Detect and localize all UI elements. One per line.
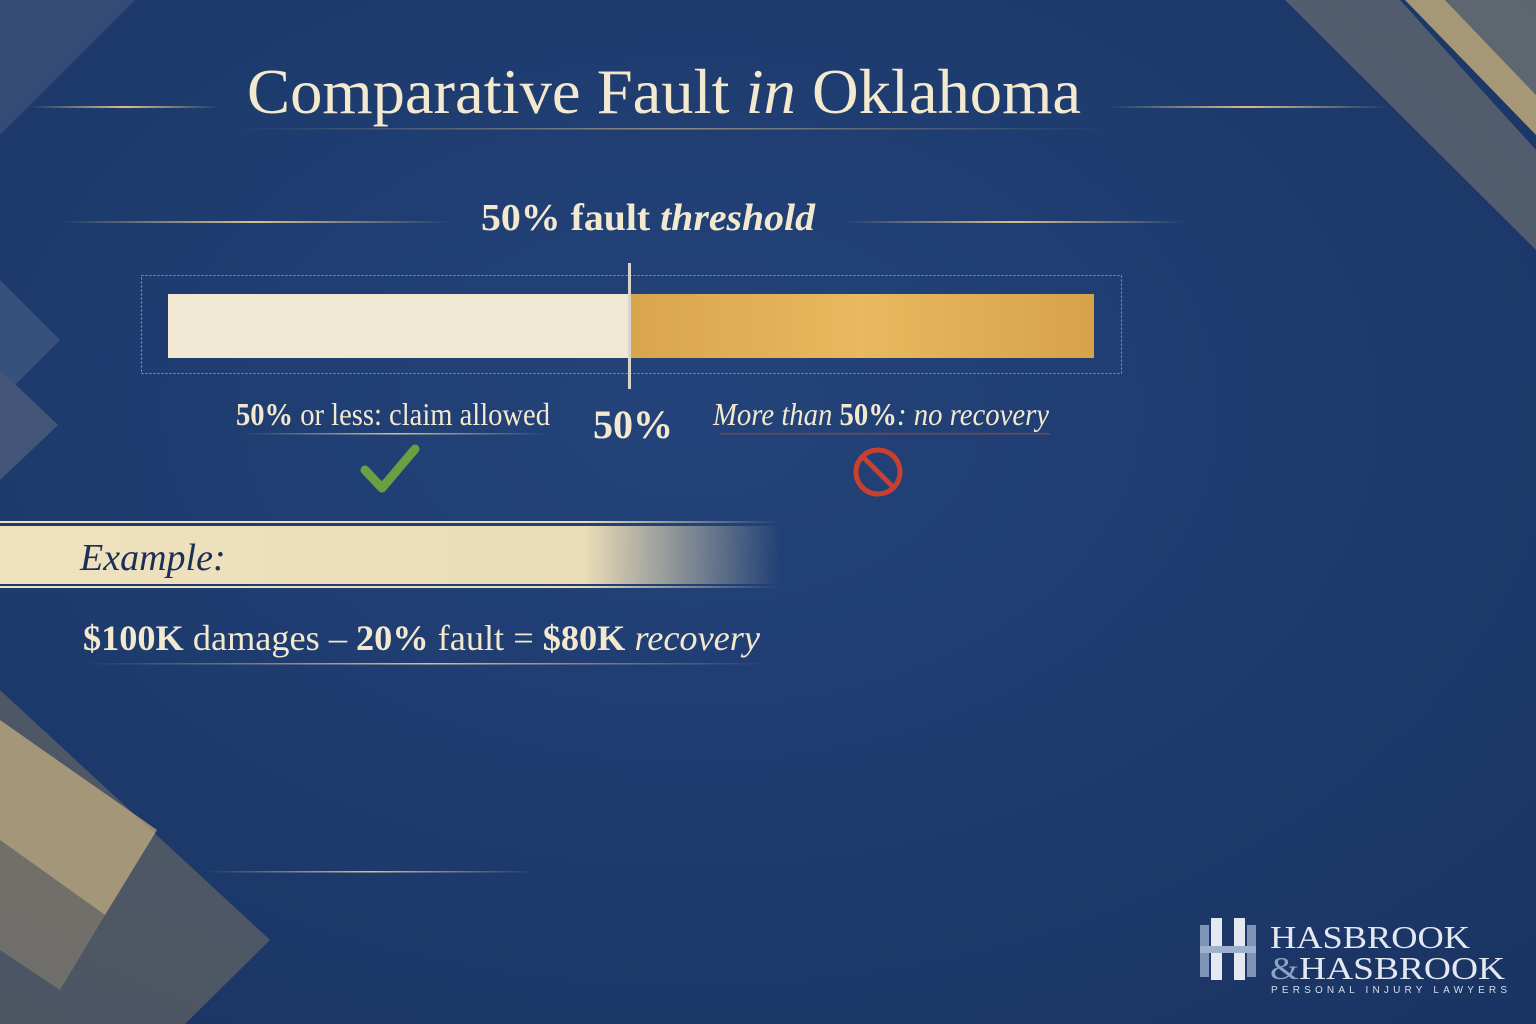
icon: check mark xyxy=(365,449,415,488)
example band xyxy=(0,521,780,588)
label: 50% or less: 50% or less: claim allowed xyxy=(236,396,550,432)
icon: prohibited xyxy=(856,450,900,494)
logo: Hasbrook & Hasbrook: PERSONAL INJURY LAWYERS xyxy=(1271,985,1507,996)
title: Comparative Fault in Oklahoma xyxy=(247,56,1081,127)
decoration: top-left triangle xyxy=(0,0,135,135)
decoration: top-right gold bands xyxy=(1285,0,1536,250)
label: more than 50%: More than 50%: no recovery xyxy=(712,396,1050,432)
decoration: left chevrons xyxy=(0,280,60,480)
divider line bottom xyxy=(205,871,535,872)
subtitle: 50% fault threshold: 50% fault threshold xyxy=(481,197,816,239)
label: 50%: 50% xyxy=(593,402,673,447)
decoration: bottom-left gold bands xyxy=(0,690,270,1024)
example equation: $100K damages – 20% fault = $80K recovery xyxy=(83,618,760,658)
logo: Hasbrook & Hasbrook: &HASBROOK xyxy=(1270,950,1505,986)
bar chart: fault threshold xyxy=(142,263,1122,389)
example band: Example: xyxy=(79,537,226,579)
logo: Hasbrook & Hasbrook xyxy=(1200,918,1507,996)
logo: Hasbrook & Hasbrook: HASBROOK xyxy=(1270,919,1470,955)
